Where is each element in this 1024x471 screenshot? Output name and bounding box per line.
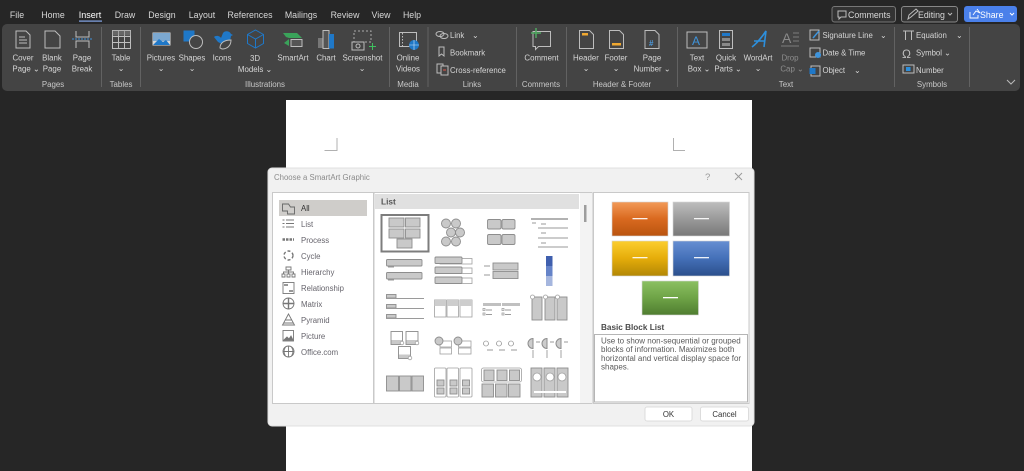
ribbon panel <box>2 24 1020 91</box>
panel: graphic thumbnails <box>374 192 592 404</box>
ribbon group: illustrations: Chart <box>316 54 336 62</box>
ribbon group: text: Text <box>779 80 794 89</box>
ribbon group: media: Online <box>397 54 420 62</box>
ribbon group: header and footer: Header & Footer <box>593 80 652 89</box>
ribbon group: media: Videos <box>396 64 420 74</box>
thumbnail row 4 <box>391 332 568 360</box>
panel: graphic thumbnails: List <box>381 196 396 206</box>
ribbon group: header and footer: Number ⌄ <box>634 64 670 74</box>
ribbon group: comments: Comments <box>522 80 560 89</box>
ribbon group: links: Link <box>450 31 464 40</box>
ribbon group: text: Box ⌄ <box>688 64 710 74</box>
ribbon group: text: Parts ⌄ <box>714 64 742 74</box>
panel: category list: Picture <box>301 332 325 341</box>
category icons <box>282 220 295 357</box>
ribbon group: header and footer: Page <box>643 54 662 62</box>
ribbon group: pages: Blank <box>42 54 62 62</box>
list header <box>375 194 579 209</box>
button: OK: OK <box>663 410 675 419</box>
ribbon group: illustrations: Screenshot <box>343 54 383 62</box>
ribbon tab bar: Design <box>148 10 176 20</box>
ribbon tab bar: References <box>228 10 273 20</box>
ribbon group: text: WordArt <box>744 54 773 62</box>
thumbnail row 1 <box>442 219 568 247</box>
ribbon group: links: ⌄ <box>472 31 479 40</box>
ribbon group: text: ⌄ <box>854 66 861 75</box>
ribbon tab bar: Home <box>41 10 65 20</box>
ribbon group: symbols: ⌄ <box>956 31 963 40</box>
panel: category list: All <box>301 204 310 213</box>
panel: category list: Matrix <box>301 300 322 309</box>
panel: category list <box>272 192 374 404</box>
ribbon group: tables: Tables <box>110 80 132 89</box>
button: Cancel <box>700 407 748 421</box>
thumbnail row 3 <box>386 294 567 320</box>
ribbon group: symbols: Equation <box>916 31 947 40</box>
ribbon group: text <box>687 30 887 89</box>
ribbon group: illustrations: Shapes <box>179 54 205 62</box>
ribbon tab bar: File <box>10 10 24 20</box>
ribbon group: text: A <box>692 34 700 48</box>
ribbon group: header and footer: # <box>649 39 654 48</box>
preview description: shapes. <box>601 362 629 372</box>
ribbon group: text: Date & Time <box>822 48 865 58</box>
ribbon group: text: Object <box>822 66 846 75</box>
ribbon group: text: Signature Line <box>822 31 873 40</box>
ribbon group: links: Links <box>463 80 481 89</box>
ribbon group: illustrations <box>147 30 383 89</box>
dialog: Choose a SmartArt Graphic <box>268 168 754 426</box>
panel: category list: Relationship <box>301 284 345 293</box>
ribbon group: illustrations: Icons <box>213 54 231 62</box>
ribbon group: links <box>436 31 506 89</box>
icon: all <box>282 204 294 214</box>
ribbon group: illustrations: Models ⌄ <box>238 65 272 74</box>
ribbon group: media <box>396 32 420 89</box>
ribbon group: tables: ⌄ <box>118 64 124 73</box>
ribbon tab bar: Draw <box>115 10 136 20</box>
ribbon group: header and footer: Header <box>573 54 599 62</box>
ribbon group: illustrations: Illustrations <box>245 80 285 89</box>
ribbon group: header and footer <box>573 30 670 89</box>
ribbon group: symbols: Number <box>916 66 944 75</box>
ribbon group: links: Bookmark <box>450 48 485 58</box>
dialog title: Choose a SmartArt Graphic <box>274 173 370 182</box>
ribbon group: comments: Comment <box>524 54 559 62</box>
ribbon group: links: Cross-reference <box>450 66 506 75</box>
ribbon group: header and footer: ⌄ <box>613 64 619 73</box>
ribbon group: illustrations: Pictures <box>147 54 175 62</box>
ribbon tab bar <box>10 10 421 22</box>
ribbon group: symbols <box>902 31 963 89</box>
ribbon group: illustrations: SmartArt <box>277 54 309 62</box>
top right buttons <box>832 6 1017 22</box>
button: OK <box>645 407 692 421</box>
preview description: blocks of information. Maximizes both <box>601 345 734 354</box>
ribbon group: text: ⌄ <box>880 31 887 40</box>
preview description: horizontal and vertical display space for <box>601 354 741 363</box>
top right buttons: Share <box>980 10 1004 20</box>
ribbon group: illustrations: ⌄ <box>158 64 164 73</box>
preview description: Use to show non-sequential or grouped <box>601 336 741 346</box>
ribbon group: text: Drop <box>781 54 799 62</box>
ribbon group: illustrations: 3D <box>250 54 260 63</box>
ribbon group: text: Cap ⌄ <box>780 64 804 74</box>
ribbon group: header and footer: Footer <box>605 54 628 62</box>
ribbon group: pages: Pages <box>42 80 64 89</box>
ribbon group: pages: Break <box>72 64 92 74</box>
ribbon group: pages <box>12 31 92 89</box>
ribbon group: pages: Page <box>43 64 62 74</box>
ribbon group: tables <box>110 30 132 89</box>
panel: category list: List <box>301 220 314 229</box>
help and close buttons <box>705 172 742 183</box>
preview description <box>594 334 748 402</box>
preview diagram <box>612 202 730 315</box>
panel: category list: Cycle <box>301 252 320 261</box>
ribbon group: text: Text <box>690 54 705 62</box>
ribbon group: illustrations: ⌄ <box>189 64 195 73</box>
document page <box>286 100 752 471</box>
panel: category list: Process <box>301 236 329 245</box>
top right buttons: Editing <box>918 10 945 20</box>
thumbnail row 2 <box>386 256 552 286</box>
ribbon group: symbols: Symbols <box>917 80 947 89</box>
panel: preview <box>594 192 749 404</box>
ribbon group: tables: Table <box>112 54 131 62</box>
selected thumbnail: basic block list <box>382 215 428 252</box>
preview title: Basic Block List <box>601 323 665 332</box>
ribbon group: symbols: Symbol ⌄ <box>916 48 951 58</box>
ribbon tab bar: Mailings <box>285 10 318 20</box>
panel: category list: Office.com <box>301 348 338 357</box>
ribbon tab bar: Insert <box>79 10 102 20</box>
ribbon group: pages: Page ⌄ <box>12 64 40 74</box>
ribbon tab bar: Review <box>331 10 360 20</box>
ribbon group: comments <box>522 28 560 89</box>
ribbon tab bar: Help <box>403 10 421 20</box>
scrollbar <box>580 193 592 403</box>
top right buttons: Comments <box>848 10 891 20</box>
ribbon tab bar: View <box>372 10 391 20</box>
ribbon group: header and footer: ⌄ <box>583 64 589 73</box>
ribbon group: text: ⌄ <box>755 64 761 73</box>
help and close buttons: ? <box>705 172 710 183</box>
ribbon group: illustrations: ⌄ <box>359 64 365 73</box>
thumbnail row 5 <box>386 368 568 397</box>
button: Cancel: Cancel <box>712 410 737 419</box>
ribbon separators <box>102 27 970 87</box>
panel: category list: Pyramid <box>301 316 330 325</box>
ribbon collapse chevron <box>1007 80 1015 84</box>
ribbon tab bar: Layout <box>189 10 216 20</box>
ribbon group: pages: Cover <box>12 54 34 62</box>
panel: category list: Hierarchy <box>301 268 334 277</box>
ribbon group: text: Quick <box>716 54 736 62</box>
ribbon group: pages: Page <box>73 54 92 62</box>
ribbon group: media: Media <box>397 80 419 89</box>
ribbon group: symbols: Ω <box>902 47 911 61</box>
ribbon group: text: A <box>782 30 792 46</box>
